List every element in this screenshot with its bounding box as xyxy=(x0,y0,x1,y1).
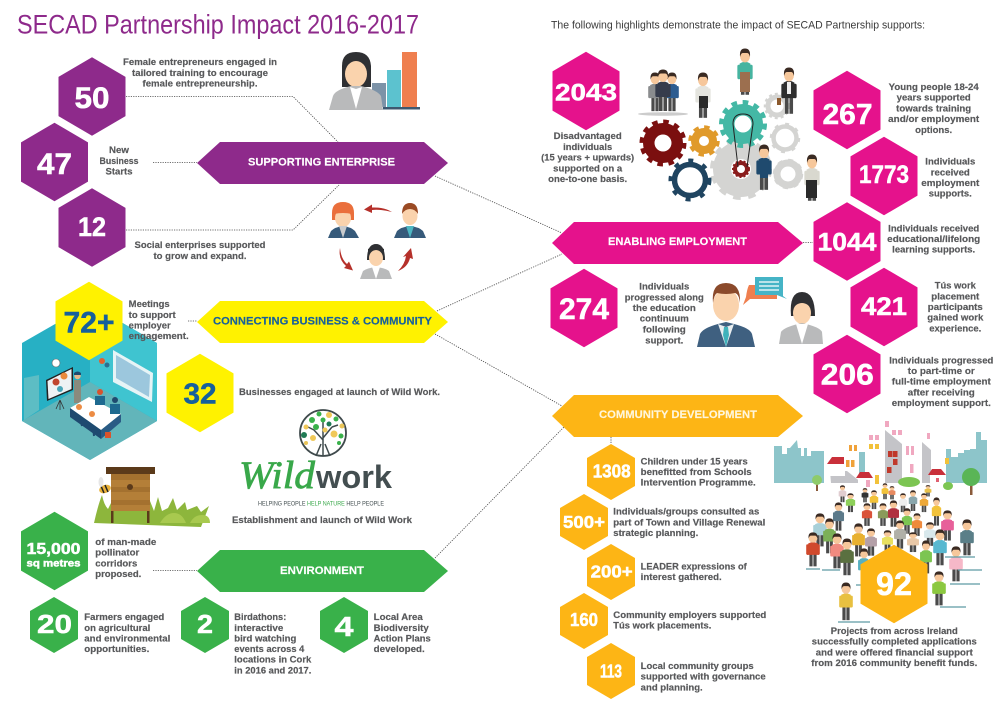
stat: 20 farmers: on agricultural xyxy=(84,623,150,633)
stat: 15,000 sq metres: 15,000 xyxy=(26,541,81,558)
stat: 160 community employers: Community employers supported xyxy=(613,610,766,620)
stat: 1044 learning supports: educational/lifelong xyxy=(887,234,980,244)
stat: 92 projects: and were offered financial support xyxy=(816,647,973,657)
stat: 2 birdathons: bird watching xyxy=(234,633,296,643)
stat: 206 progressed to employment: Individuals progressed xyxy=(889,355,993,365)
stat: 1044 learning supports xyxy=(814,202,980,281)
man, white shirt xyxy=(804,155,820,201)
stat: 20 farmers xyxy=(30,597,170,654)
icon: businesswoman with bar chart xyxy=(329,52,420,110)
stat: 113 local groups: 113 xyxy=(600,662,622,682)
stat: 2043 disadvantaged individuals xyxy=(541,52,634,184)
stat: 160 community employers: Tús work placements. xyxy=(613,621,711,631)
gear: grey top xyxy=(765,94,789,118)
stat: 113 local groups: supported with governance xyxy=(641,672,766,682)
stat: 47 new business starts: Starts xyxy=(106,166,132,176)
banner: connecting business and community xyxy=(197,301,448,343)
woman, navy suit xyxy=(756,145,772,190)
stat: 1044 learning supports: 1044 xyxy=(818,229,877,257)
stat: 200+ LEADER expressions: LEADER expressions of xyxy=(641,561,748,571)
stat: 421 Tús placements: placement xyxy=(931,291,979,301)
stat: 160 community employers: 160 xyxy=(570,610,598,630)
stat: 274 education continuum: 274 xyxy=(559,293,609,326)
stat: 72+ meetings: to support xyxy=(129,310,176,320)
woman, white blouse xyxy=(695,73,711,118)
stat: 1308 children: benefitted from Schools xyxy=(641,467,752,477)
stat: 4 biodiversity plans: Local Area xyxy=(374,612,424,622)
stat: 267 young people: options. xyxy=(915,125,952,135)
illustration: crowd of people xyxy=(806,483,982,622)
stat: 1308 children xyxy=(587,444,756,500)
banner: supporting enterprise xyxy=(197,142,448,184)
logo: wild work xyxy=(232,410,413,526)
stat: 50 female entrepreneurs xyxy=(58,57,277,136)
group of three businessmen xyxy=(638,70,688,116)
stat: 274 education continuum: continuum xyxy=(640,314,689,324)
stat: 421 Tús placements: 421 xyxy=(861,293,907,321)
stat: 15,000 sq metres: sq metres xyxy=(26,558,81,570)
logo: wild work: HELPING PEOPLE HELP NATURE HELP PEOPLE xyxy=(258,501,384,508)
stat: 2 birdathons: Birdathons: xyxy=(234,612,286,622)
man, dark suit xyxy=(777,68,797,114)
banner: community development: COMMUNITY DEVELOPMENT xyxy=(599,409,757,421)
stat: 1308 children: 1308 xyxy=(593,462,631,482)
stat: 113 local groups: and planning. xyxy=(641,682,703,692)
gear: orange xyxy=(690,127,718,155)
stat: 421 Tús placements xyxy=(850,268,984,346)
stat: 500+ consulted xyxy=(560,494,765,550)
stat: 2043 disadvantaged individuals: (15 years + upwards) xyxy=(541,153,634,163)
stat: 267 young people: 267 xyxy=(822,99,872,131)
connector lines xyxy=(126,96,813,570)
stat: 206 progressed to employment xyxy=(814,335,993,413)
gear: teal xyxy=(722,102,764,146)
stat: 72+ meetings xyxy=(56,282,189,360)
illustration: gears and people xyxy=(638,49,820,201)
stat: 2043 disadvantaged individuals: Disadvantaged xyxy=(554,131,622,141)
banner: environment xyxy=(197,550,448,592)
banner: enabling employment xyxy=(552,222,803,264)
stat: 15,000 sq metres: pollinator xyxy=(95,548,140,558)
stat: 92 projects: from 2016 community benefit funds. xyxy=(811,658,977,668)
stat: 1773 employment supports: supports. xyxy=(929,189,972,199)
stat: 267 young people xyxy=(814,71,979,149)
icon: three people with arrows xyxy=(328,202,426,279)
stat: 2 birdathons: events across 4 xyxy=(234,644,304,654)
stat: 92 projects: 92 xyxy=(876,566,912,602)
stat: 12 social enterprises: 12 xyxy=(78,212,106,242)
stat: 500+ consulted: part of Town and Village Renewal xyxy=(613,517,765,527)
stat: 50 female entrepreneurs: female entrepreneurship. xyxy=(142,78,258,88)
illustration: beehive and grass xyxy=(94,467,210,527)
banner: enabling employment: ENABLING EMPLOYMENT xyxy=(608,236,747,248)
stat: 267 young people: years supported xyxy=(897,93,971,103)
banner: environment: ENVIRONMENT xyxy=(280,565,364,577)
subtitle: The following highlights demonstrate the impact of SECAD Partnership supports: xyxy=(551,20,925,32)
stat: 113 local groups: Local community groups xyxy=(641,661,754,671)
stat: 206 progressed to employment: after receiving xyxy=(908,387,975,397)
stat: 1773 employment supports: 1773 xyxy=(859,161,909,189)
title: SECAD Partnership Impact 2016-2017 xyxy=(17,10,419,40)
stat: 15,000 sq metres: proposed. xyxy=(95,569,141,579)
stat: 500+ consulted: strategic planning. xyxy=(613,528,698,538)
stat: 421 Tús placements: participants xyxy=(928,302,983,312)
stat: 12 social enterprises: to grow and expand. xyxy=(154,251,246,261)
stat: 1773 employment supports: received xyxy=(931,167,970,177)
stat: 32 businesses: Businesses engaged at launch of Wild Work. xyxy=(239,387,440,397)
stat: 421 Tús placements: Tús work xyxy=(935,281,977,291)
stat: 2043 disadvantaged individuals: supported on a xyxy=(553,163,623,173)
gear: dark red xyxy=(642,122,684,164)
stat: 4 biodiversity plans: 4 xyxy=(334,611,354,642)
stat: 92 projects: successfully completed applications xyxy=(812,637,977,647)
gear: grey large xyxy=(712,140,770,198)
stat: 20 farmers: opportunities. xyxy=(84,644,149,654)
woman, teal top xyxy=(737,49,753,95)
stat: 2 birdathons: interactive xyxy=(234,623,283,633)
stat: 32 businesses: 32 xyxy=(184,379,216,411)
stat: 15,000 sq metres: of man-made xyxy=(95,537,156,547)
banner: connecting business and community: CONNECTING BUSINESS & COMMUNITY xyxy=(213,316,433,328)
banner: community development xyxy=(552,395,803,437)
stat: 206 progressed to employment: to part-time or xyxy=(908,366,975,376)
stat: 2043 disadvantaged individuals: one-to-one basis. xyxy=(548,174,627,184)
logo: wild work: Establishment and launch of Wild Work xyxy=(232,515,413,526)
stat: 206 progressed to employment: 206 xyxy=(821,358,874,391)
stat: 274 education continuum xyxy=(550,269,704,347)
belt xyxy=(733,114,753,167)
stat: 1308 children: Intervention Programme. xyxy=(641,478,756,488)
stat: 50 female entrepreneurs: 50 xyxy=(74,82,110,115)
stat: 267 young people: and/or employment xyxy=(888,114,979,124)
stat: 200+ LEADER expressions xyxy=(587,544,748,600)
gear: navy xyxy=(670,160,710,200)
stat: 160 community employers xyxy=(560,593,766,649)
illustration: isometric meeting room xyxy=(22,304,157,460)
stat: 1044 learning supports: Individuals received xyxy=(888,223,979,233)
gear: grey ring xyxy=(771,124,799,152)
stat: 267 young people: towards training xyxy=(896,103,971,113)
stat: 4 biodiversity plans: developed. xyxy=(374,644,425,654)
stat: 1773 employment supports: employment xyxy=(921,178,979,188)
stat: 47 new business starts: 47 xyxy=(37,148,72,181)
gear: red small xyxy=(733,161,749,177)
stat: 92 projects xyxy=(811,545,977,668)
stat: 2 birdathons: 2 xyxy=(197,609,213,639)
stat: 267 young people: Young people 18-24 xyxy=(889,82,979,92)
stat: 15,000 sq metres xyxy=(21,512,156,590)
stat: 15,000 sq metres: corridors xyxy=(95,558,137,568)
stat: 2 birdathons: in 2016 and 2017. xyxy=(234,665,311,675)
illustration: cityscape xyxy=(774,421,987,495)
stat: 421 Tús placements: gained work xyxy=(927,313,984,323)
stat: 2 birdathons xyxy=(181,597,312,675)
stat: 274 education continuum: Individuals xyxy=(639,282,689,292)
stat: 72+ meetings: 72+ xyxy=(64,307,114,340)
stat: 4 biodiversity plans: Action Plans xyxy=(374,633,431,643)
stat: 200+ LEADER expressions: 200+ xyxy=(591,562,633,582)
stat: 4 biodiversity plans xyxy=(320,597,431,654)
stat: 50 female entrepreneurs: tailored training to encourage xyxy=(132,68,268,78)
stat: 72+ meetings: engagement. xyxy=(129,331,189,341)
stat: 20 farmers: 20 xyxy=(37,609,72,639)
stat: 200+ LEADER expressions: interest gathered. xyxy=(641,572,722,582)
stat: 1308 children: Children under 15 years xyxy=(641,456,748,466)
stat: 206 progressed to employment: full-time employment xyxy=(892,377,991,387)
stat: 1773 employment supports: Individuals xyxy=(925,157,975,167)
stat: 4 biodiversity plans: Biodiversity xyxy=(374,623,429,633)
stat: 12 social enterprises xyxy=(58,188,266,267)
logo: wild work: work xyxy=(315,459,392,495)
stat: 500+ consulted: 500+ xyxy=(563,512,605,532)
stat: 12 social enterprises: Social enterprises supported xyxy=(134,240,266,250)
stat: 92 projects: Projects from across Ireland xyxy=(831,626,958,636)
stat: 274 education continuum: the education xyxy=(633,303,696,313)
stat: 421 Tús placements: experience. xyxy=(929,324,981,334)
stat: 50 female entrepreneurs: Female entrepreneurs engaged in xyxy=(123,57,277,67)
stat: 72+ meetings: Meetings xyxy=(129,299,170,309)
stat: 2 birdathons: locations in Cork xyxy=(234,655,312,665)
banner: supporting enterprise: SUPPORTING ENTERPRISE xyxy=(248,157,395,169)
stat: 20 farmers: and environmental xyxy=(84,633,170,643)
gear: grey solid xyxy=(774,160,802,188)
stat: 500+ consulted: Individuals/groups consulted as xyxy=(613,507,759,517)
stat: 1773 employment supports xyxy=(850,137,979,215)
stat: 274 education continuum: progressed along xyxy=(625,292,704,302)
stat: 1044 learning supports: learning supports. xyxy=(892,245,975,255)
icon: man and woman talking xyxy=(697,277,823,347)
logo: wild work: Wild xyxy=(239,454,316,497)
stat: 72+ meetings: employer xyxy=(129,320,171,330)
stat: 47 new business starts: New xyxy=(109,145,130,155)
stat: 47 new business starts: Business xyxy=(100,156,138,166)
stat: 113 local groups xyxy=(587,643,766,699)
stat: 274 education continuum: following xyxy=(643,325,686,335)
stat: 20 farmers: Farmers engaged xyxy=(84,612,164,622)
stat: 2043 disadvantaged individuals: individuals xyxy=(563,142,612,152)
stat: 274 education continuum: support. xyxy=(645,335,683,345)
stat: 47 new business starts xyxy=(21,123,138,201)
stat: 206 progressed to employment: employment support. xyxy=(892,398,991,408)
stat: 2043 disadvantaged individuals: 2043 xyxy=(555,80,617,107)
stat: 32 businesses xyxy=(166,354,440,432)
